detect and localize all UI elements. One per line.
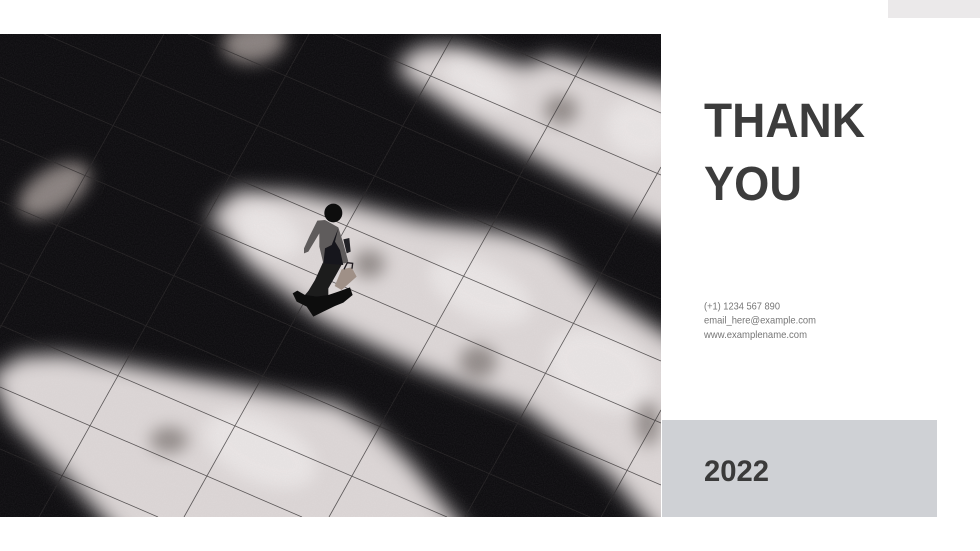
title: THANK YOU [704, 95, 865, 211]
title: THANK YOU: YOU [704, 158, 802, 211]
film grain [0, 34, 661, 517]
light patches [0, 46, 690, 545]
year label: 2022 [704, 455, 769, 488]
head [324, 204, 342, 222]
contact details: (+1) 1234 567 890 [704, 300, 780, 312]
photo: person walking through light and shadow on tiled floor [0, 34, 661, 517]
contact details [703, 300, 816, 341]
title: THANK YOU: THANK [704, 95, 865, 148]
contact details: email_here@example.com [704, 314, 816, 326]
cast shadow [293, 283, 353, 317]
contact details: www.examplename.com [703, 329, 807, 341]
strap and dark side [323, 228, 343, 265]
shadowy mottling on the light patches [150, 95, 660, 453]
year panel [662, 420, 937, 517]
shirt [304, 220, 348, 263]
bright highlights [207, 54, 661, 486]
shopping bag [335, 267, 357, 290]
floor tile grid [0, 34, 661, 517]
walking person with shadow [293, 204, 357, 317]
back bag [343, 238, 351, 253]
legs [306, 262, 343, 297]
corner tab [888, 0, 980, 18]
small light blobs [9, 16, 289, 229]
